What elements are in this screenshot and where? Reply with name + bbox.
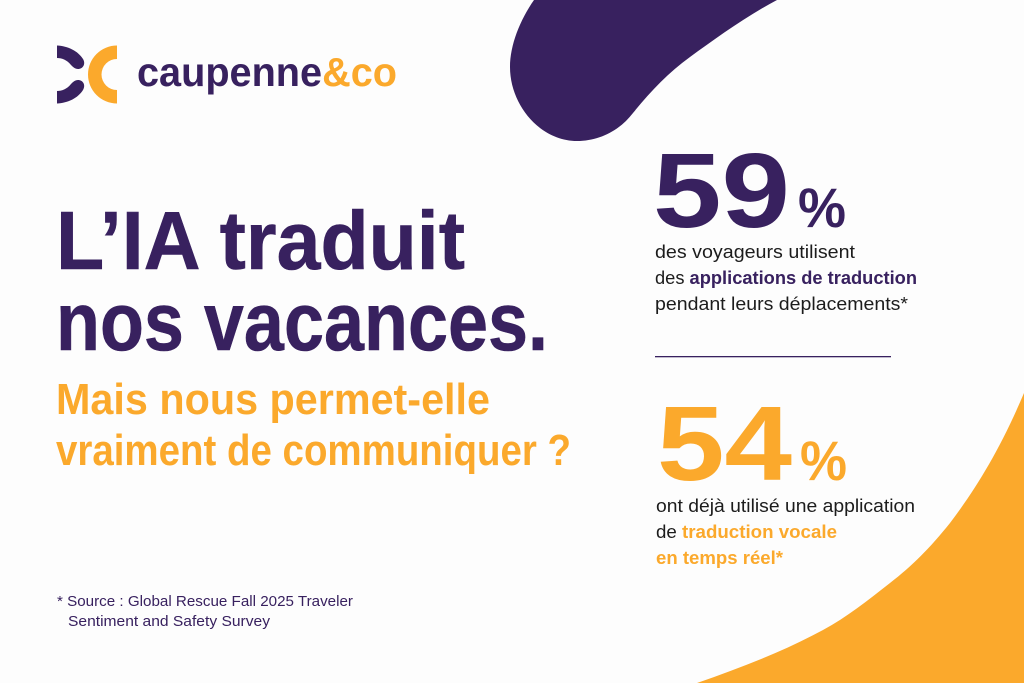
stat: 54%: % (800, 429, 847, 492)
subtitle (56, 375, 571, 475)
stat: 59% (653, 132, 917, 314)
logo (57, 46, 397, 104)
title: nos vacances. (56, 275, 548, 368)
stat: 54%: 54 (657, 385, 792, 503)
stat: 59%: 59 (653, 132, 790, 250)
description 54%: en temps réel* (656, 548, 783, 568)
stat: 59%: % (798, 176, 846, 239)
footnote source: * Source : Global Rescue Fall 2025 Traveler (57, 594, 353, 610)
footnote source (57, 594, 353, 630)
stat: 54% (656, 385, 915, 568)
description 59%: pendant leurs déplacements* (655, 294, 908, 314)
logo wordmark: caupenne&co (137, 49, 397, 95)
title (56, 194, 548, 368)
description 59% (655, 242, 917, 314)
description 54%: ont déjà utilisé une application (656, 496, 915, 516)
subtitle: vraiment de communiquer ? (56, 426, 571, 475)
logo mark (57, 46, 117, 104)
description 59%: des voyageurs utilisent (655, 242, 855, 262)
purple blob top right (510, 0, 777, 141)
orange wave bottom right (697, 393, 1024, 683)
description 59%: des applications de traduction (655, 268, 917, 288)
title: L’IA traduit (56, 194, 465, 287)
description 54%: de traduction vocale (656, 522, 837, 542)
subtitle: Mais nous permet-elle (56, 375, 490, 424)
footnote source: Sentiment and Safety Survey (68, 614, 271, 630)
description 54% (656, 496, 915, 568)
